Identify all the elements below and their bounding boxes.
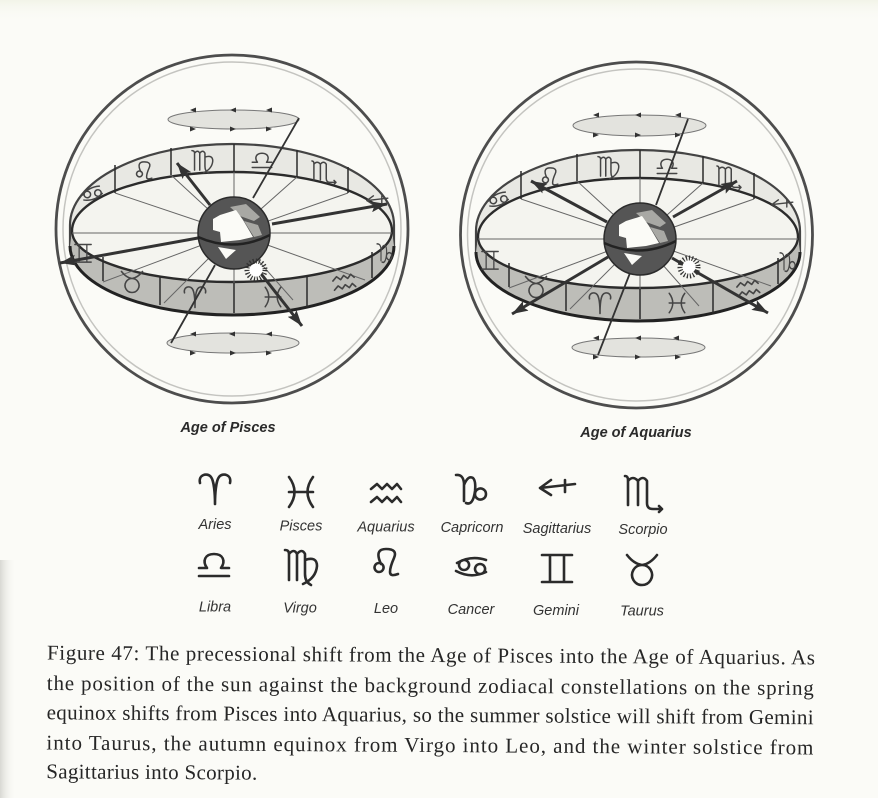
icon: Libra bbox=[199, 554, 229, 576]
tilted axis bbox=[171, 118, 299, 343]
label: Pisces: Pisces bbox=[280, 519, 322, 535]
celestial sphere outline bbox=[460, 62, 812, 408]
icon: Virgo bbox=[285, 550, 317, 585]
solstice and equinox arrows bbox=[60, 163, 387, 326]
icon: Aquarius bbox=[371, 484, 401, 502]
celestial sphere outline bbox=[56, 55, 408, 403]
tilted axis bbox=[598, 119, 688, 355]
icon: earth globe bbox=[604, 203, 676, 275]
icon: sun bbox=[247, 261, 265, 279]
figure caption: Sagittarius into Scorpio. bbox=[46, 759, 257, 785]
solstice and equinox arrows bbox=[512, 181, 768, 314]
label: Taurus: Taurus bbox=[620, 604, 664, 620]
figure caption: Figure 47: The precessional shift from the Age of Pisces into the Age of Aquarius. As bbox=[47, 641, 815, 669]
label: Cancer: Cancer bbox=[448, 602, 496, 618]
label: Aquarius: Aquarius bbox=[356, 520, 415, 536]
lower precession ellipse bbox=[167, 332, 299, 356]
figure caption: equinox shifts from Pisces into Aquarius, so the summer solstice will shift from Gemini bbox=[47, 700, 814, 729]
zodiac band bbox=[476, 150, 800, 321]
icon: Capricorn bbox=[456, 475, 486, 504]
label: Leo: Leo bbox=[374, 601, 398, 617]
band zodiac glyphs bbox=[482, 157, 795, 314]
figure caption: into Taurus, the autumn equinox from Virgo into Leo, and the winter solstice from bbox=[46, 730, 814, 759]
band zodiac glyphs bbox=[75, 151, 392, 308]
lower precession ellipse bbox=[572, 336, 705, 360]
zodiac legend bbox=[197, 475, 668, 620]
figure caption bbox=[46, 641, 815, 788]
heading: Age of Aquarius: Age of Aquarius bbox=[579, 425, 692, 441]
upper precession ellipse bbox=[573, 112, 706, 138]
icon: earth globe bbox=[198, 197, 270, 269]
icon: Taurus bbox=[627, 555, 657, 585]
label: Gemini: Gemini bbox=[533, 603, 580, 619]
icon: Leo bbox=[375, 549, 398, 575]
label: Capricorn: Capricorn bbox=[441, 520, 503, 536]
icon: sun bbox=[680, 258, 698, 276]
icon: Scorpio bbox=[625, 476, 662, 512]
icon: Gemini bbox=[542, 555, 572, 582]
icon: Sagittarius bbox=[540, 480, 575, 495]
diagram: Age of Aquarius bbox=[460, 62, 812, 408]
label: Sagittarius: Sagittarius bbox=[523, 521, 591, 537]
label: Aries: Aries bbox=[197, 517, 232, 533]
heading: Age of Pisces: Age of Pisces bbox=[179, 420, 276, 436]
upper precession ellipse bbox=[168, 108, 299, 132]
zodiac band bbox=[70, 144, 394, 315]
icon: Aries bbox=[200, 475, 230, 504]
icon: Cancer bbox=[456, 558, 486, 575]
diagram: Age of Pisces bbox=[56, 55, 408, 403]
label: Libra: Libra bbox=[199, 600, 231, 616]
label: Scorpio: Scorpio bbox=[618, 522, 668, 538]
label: Virgo: Virgo bbox=[283, 601, 317, 617]
icon: Pisces bbox=[289, 477, 313, 507]
figure caption: the position of the sun against the background zodiacal constellations on the spring bbox=[47, 671, 814, 700]
